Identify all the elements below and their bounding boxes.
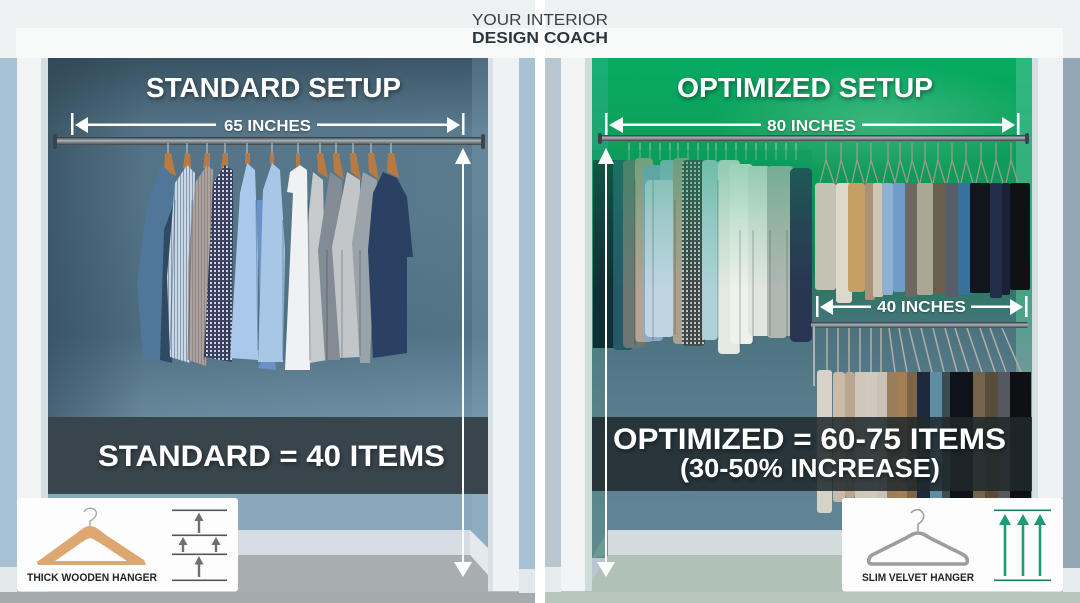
height arrow: standard <box>454 148 472 577</box>
dimension arrow: 80 inches: 80 INCHES <box>767 118 856 135</box>
band: optimized result: OPTIMIZED = 60-75 ITEMS <box>613 423 1006 456</box>
heading: optimized setup: OPTIMIZED SETUP <box>677 72 933 103</box>
band: optimized result <box>592 417 1032 491</box>
label: thick wooden hanger: THICK WOODEN HANGER <box>27 572 157 584</box>
trim: optimized closet frame <box>561 58 1063 591</box>
icon: velvet hanger <box>869 510 967 564</box>
clothes: optimized shirts <box>593 143 812 354</box>
dimension arrow: 40 inches: 40 INCHES <box>877 299 966 316</box>
heading: standard setup: STANDARD SETUP <box>146 72 401 103</box>
card: slim velvet hanger <box>842 498 1063 592</box>
header logo: DESIGN COACH <box>472 30 608 47</box>
band: standard result <box>48 417 488 494</box>
header logo: YOUR INTERIOR <box>472 12 608 29</box>
icon: wooden hanger <box>37 508 146 565</box>
panel: optimized closet <box>545 58 1080 603</box>
clothes: standard shirts <box>137 143 413 370</box>
rod: optimized lower <box>811 322 1028 386</box>
green tint over shirts <box>592 150 812 290</box>
header logo <box>472 12 608 47</box>
band: optimized result: (30-50% INCREASE) <box>680 453 940 483</box>
dimension arrow: 65 inches <box>71 113 464 135</box>
icon: narrow shelf spacing arrows <box>172 510 227 581</box>
dimension arrow: 65 inches: 65 INCHES <box>224 118 311 135</box>
dimension arrow: 80 inches <box>605 113 1020 135</box>
rod: optimized upper <box>598 133 1029 144</box>
clothes: upper trousers <box>815 143 1030 303</box>
dimension arrow: 40 inches <box>816 296 1028 317</box>
height arrow: optimized <box>597 148 615 577</box>
panel: standard closet <box>0 58 535 603</box>
band: standard result: STANDARD = 40 ITEMS <box>98 440 445 473</box>
icon: green spacing arrows <box>994 510 1051 581</box>
clothes: lower trousers <box>817 328 1031 513</box>
rod: standard <box>53 134 485 149</box>
card: thick wooden hanger <box>17 498 238 592</box>
label: slim velvet hanger: SLIM VELVET HANGER <box>862 572 974 584</box>
